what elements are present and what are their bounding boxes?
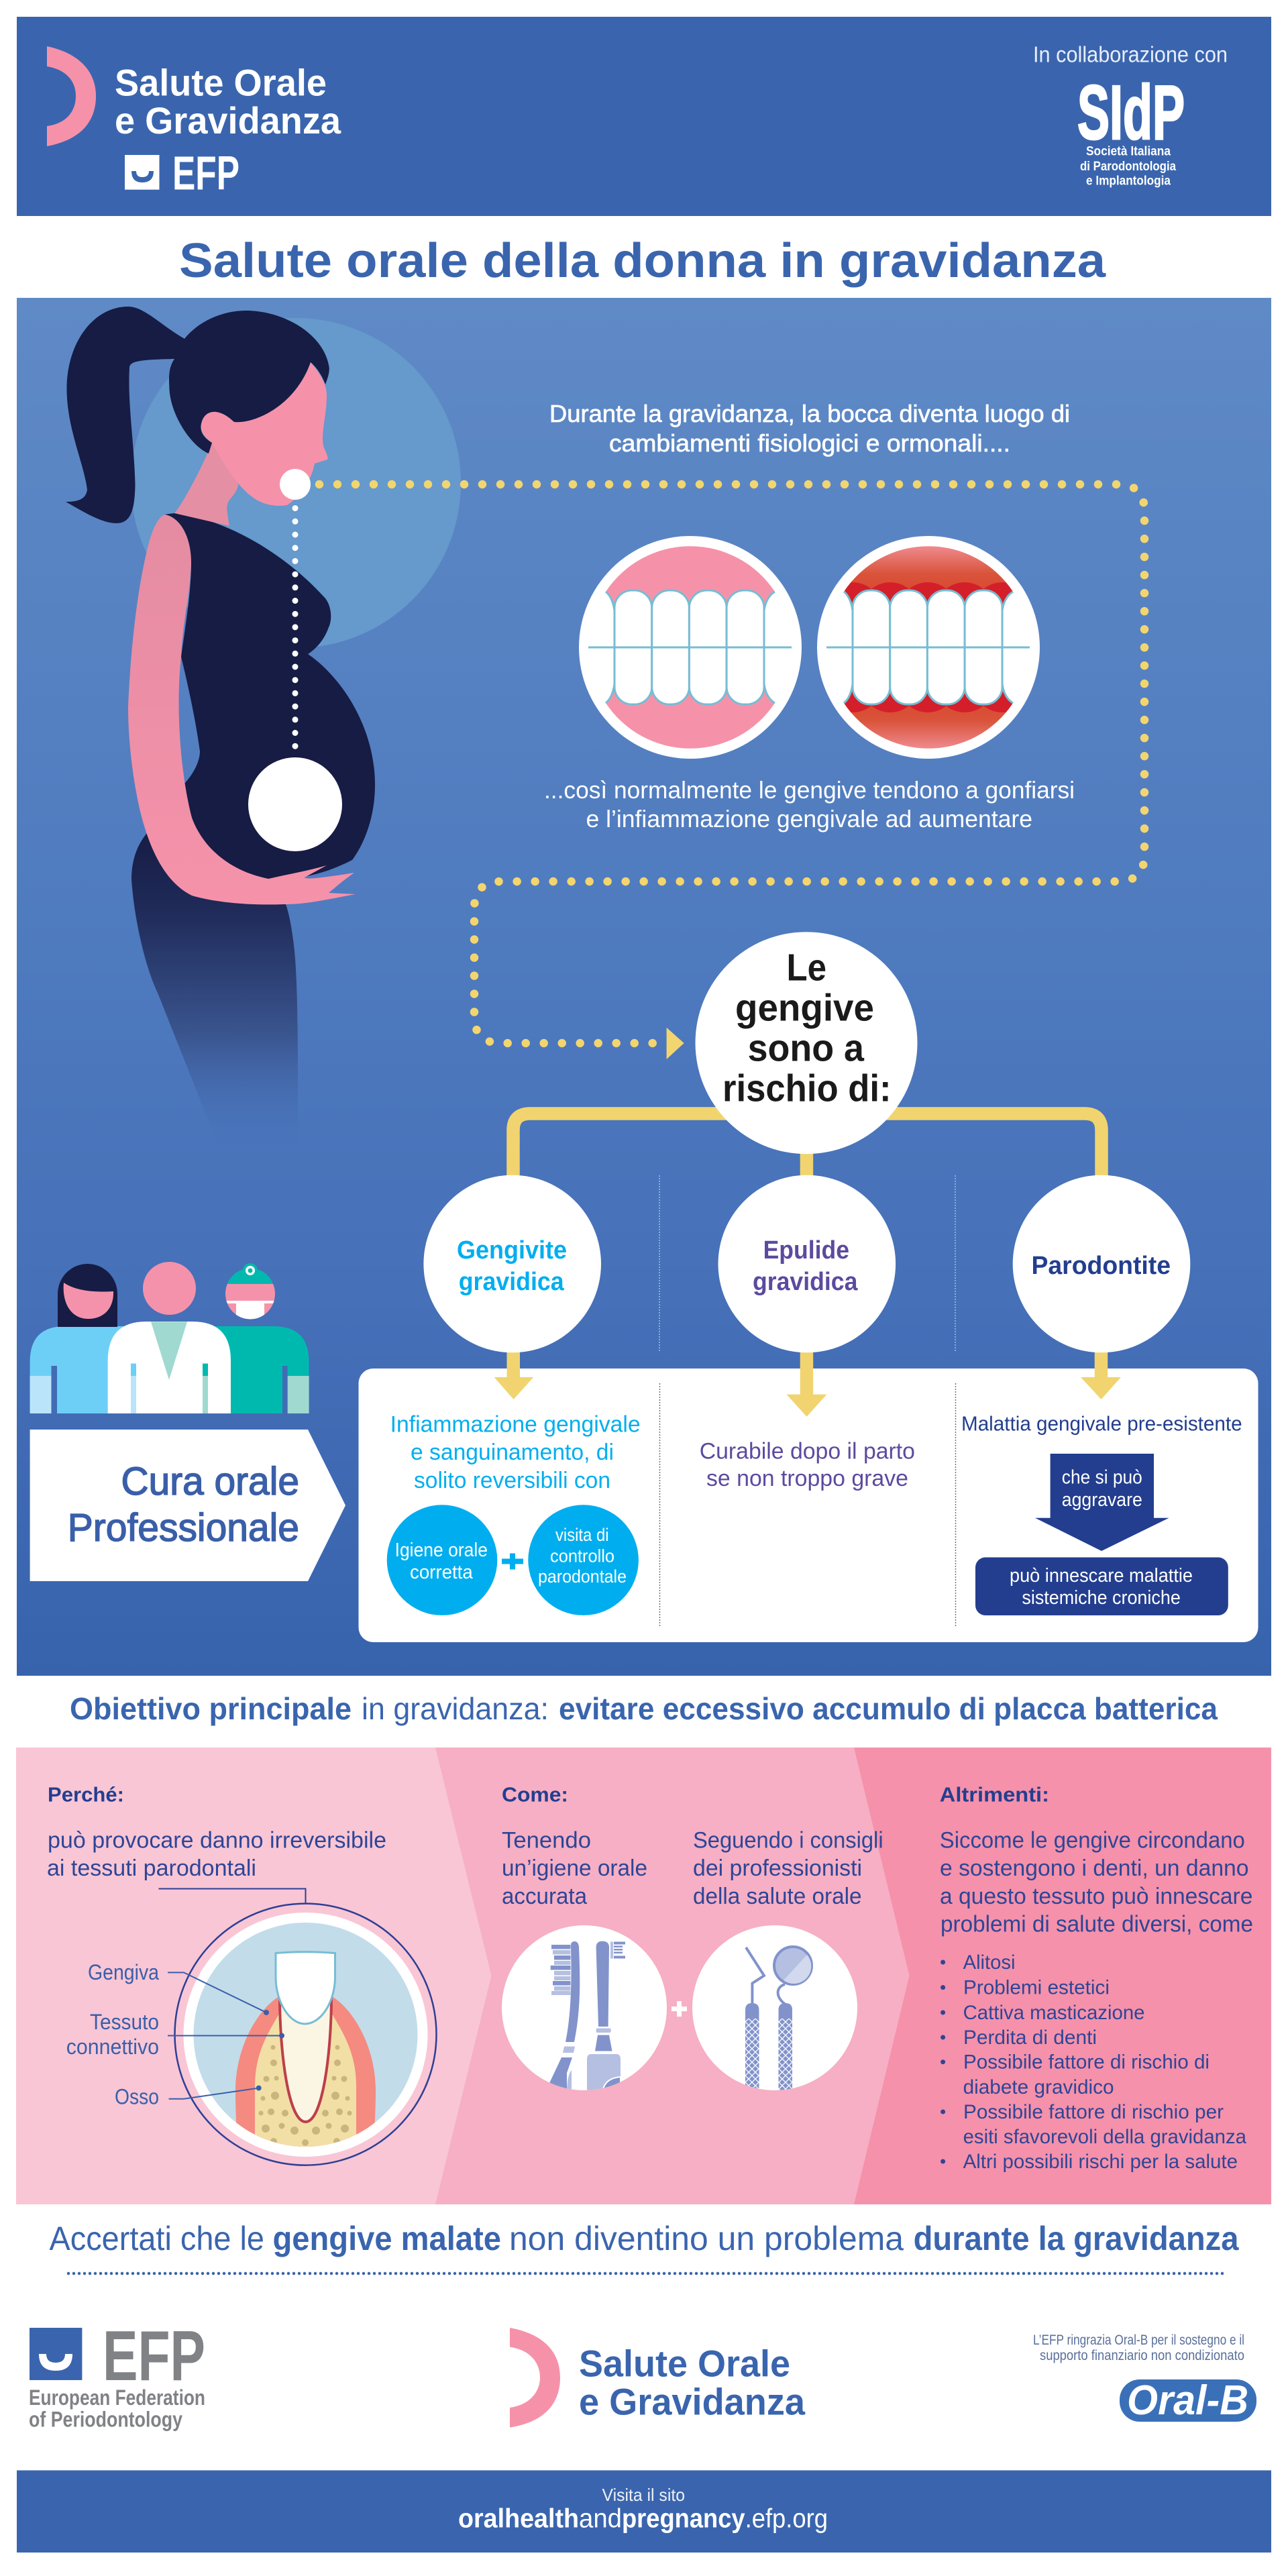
circle: gums at risk: rischio di: <box>722 1067 892 1110</box>
box: chronic systemic diseases: sistemiche croniche <box>1022 1587 1181 1609</box>
logo: SIdP <box>1077 70 1185 189</box>
text: gums consequence: e l’infiammazione gengivale ad aumentare <box>586 805 1032 833</box>
text: parodontite description: Malattia gengivale pre-esistente <box>961 1412 1242 1436</box>
section: altrimenti: problemi di salute diversi, come <box>941 1911 1253 1937</box>
text: sponsor thanks: L’EFP ringrazia Oral-B per il sostegno e il <box>1033 2332 1244 2348</box>
list: risks: Alitosi <box>963 1951 1016 1974</box>
text: epulide description: Curabile dopo il parto <box>700 1438 915 1464</box>
list: risks: Possibile fattore di rischio di <box>963 2051 1210 2074</box>
arrow: may worsen: aggravare <box>1062 1489 1142 1511</box>
heading: main goal: Obiettivo principale <box>70 1691 352 1726</box>
text: intro <box>549 400 1070 457</box>
text: gengivite description: solito reversibili con <box>414 1468 610 1493</box>
text: gengivite description <box>390 1412 641 1493</box>
logo: Salute Orale e Gravidanza <box>47 46 341 146</box>
circle: gums at risk: Le <box>786 947 826 989</box>
heading: closing message: durante la gravidanza <box>914 2220 1240 2257</box>
labels: tooth parts: connettivo <box>66 2035 159 2059</box>
logo: Salute Orale e Gravidanza <box>510 2328 806 2428</box>
logo: Salute Orale e Gravidanza: Salute Orale <box>579 2343 790 2384</box>
probe <box>745 1947 764 2092</box>
logo: SIdP: di Parodontologia <box>1080 160 1176 174</box>
heading: main goal: evitare eccessivo accumulo di placca batterica <box>559 1691 1218 1726</box>
box: chronic systemic diseases: può innescare malattie <box>1010 1565 1193 1587</box>
section: come: un’igiene orale <box>502 1856 647 1881</box>
badge: periodontal check-up: visita di <box>555 1525 609 1545</box>
labels: tooth parts: Gengiva <box>88 1960 159 1984</box>
panel: pink chevron band <box>16 1748 1271 2204</box>
logo: EFP European Federation of Periodontology: EFP <box>103 2316 205 2396</box>
list: risks: Cattiva masticazione <box>963 2002 1144 2024</box>
panel: white info card <box>358 1368 1258 1642</box>
list: risks: Possibile fattore di rischio per <box>963 2101 1224 2123</box>
badge: correct oral hygiene <box>387 1505 497 1615</box>
logo: Salute Orale e Gravidanza: e Gravidanza <box>115 99 341 142</box>
circle: gums at risk: sono a <box>748 1027 865 1070</box>
logo: EFP European Federation of Periodontology: of Periodontology <box>29 2407 182 2431</box>
section: come: Tenendo <box>502 1827 591 1853</box>
card dividers <box>660 1383 955 1627</box>
text: sponsor thanks <box>1033 2332 1244 2363</box>
arrow: parodontite <box>1081 1348 1121 1399</box>
electric brush <box>587 1941 625 2093</box>
section: altrimenti: Siccome le gengive circondano <box>940 1827 1245 1853</box>
logo: EFP white: EFP <box>172 148 239 201</box>
icon: healthy gums <box>579 536 802 759</box>
diagram: tooth cross-section <box>66 1889 436 2165</box>
illustration: care team <box>30 1262 309 1413</box>
logo: Salute Orale e Gravidanza: e Gravidanza <box>579 2381 806 2423</box>
section: come: Seguendo i consigli <box>693 1827 883 1853</box>
website link: oralhealth <box>458 2504 579 2533</box>
header banner <box>17 17 1271 216</box>
icon: dental instruments <box>692 1925 857 2092</box>
mirror <box>774 1947 812 2092</box>
arrow: may worsen <box>1035 1454 1169 1551</box>
text: epulide description: se non troppo grave <box>706 1466 908 1491</box>
list: risks <box>941 1951 1246 2173</box>
icon: inflamed gums <box>817 536 1040 759</box>
list: risks: Altri possibili rischi per la salute <box>963 2151 1238 2173</box>
heading: main goal <box>70 1691 1218 1726</box>
section: altrimenti: e sostengono i denti, un danno <box>940 1856 1249 1881</box>
section: perché: ai tessuti parodontali <box>47 1856 256 1881</box>
footer banner: Visita il sito <box>602 2485 685 2505</box>
heading: closing message: gengive malate <box>272 2220 501 2257</box>
badge: correct oral hygiene: corretta <box>410 1562 474 1583</box>
icon: toothbrushes <box>502 1925 667 2093</box>
section: come: accurata <box>502 1884 587 1909</box>
circle: gengivite gravidica <box>423 1175 601 1352</box>
callout: professional oral care: Cura orale <box>121 1460 299 1503</box>
section: perché: Perché: <box>48 1783 124 1807</box>
heading: closing message: Accertati che le <box>50 2220 264 2257</box>
website link <box>458 2504 828 2533</box>
website link: and <box>579 2504 622 2533</box>
section: perché <box>47 1783 386 1881</box>
section: altrimenti: a questo tessuto può innescare <box>940 1884 1252 1909</box>
text: intro: cambiamenti fisiologici e ormonali.... <box>609 429 1010 457</box>
circle: gengivite gravidica: Gengivite <box>457 1236 567 1265</box>
badge: periodontal check-up: parodontale <box>538 1566 627 1587</box>
logo: SIdP: e Implantologia <box>1086 174 1171 189</box>
section: perché: può provocare danno irreversibile <box>48 1827 386 1853</box>
circle: gengivite gravidica: gravidica <box>459 1268 565 1296</box>
box: chronic systemic diseases <box>975 1558 1228 1615</box>
title: Salute orale della donna in gravidanza <box>179 234 1106 288</box>
circle: gums at risk <box>695 932 918 1154</box>
section: altrimenti <box>940 1783 1253 2173</box>
section: come <box>502 1783 883 1909</box>
circle: epulide gravidica: Epulide <box>763 1236 849 1265</box>
text: gengivite description: Infiammazione gengivale <box>390 1412 641 1438</box>
labels: tooth parts: Osso <box>115 2085 159 2109</box>
heading: closing message <box>50 2220 1240 2257</box>
mouth marker <box>280 469 311 500</box>
section: come: della salute orale <box>693 1884 861 1909</box>
text: gums consequence: ...così normalmente le gengive tendono a gonfiarsi <box>544 776 1075 804</box>
heading: main goal: in gravidanza: <box>362 1691 549 1726</box>
arrow: may worsen: che si può <box>1062 1467 1142 1489</box>
logo: EFP European Federation of Periodontology: European Federation <box>29 2385 205 2410</box>
logo: Salute Orale e Gravidanza: Salute Orale <box>115 62 327 104</box>
badge: periodontal check-up <box>528 1505 639 1615</box>
list: risks: Perdita di denti <box>963 2027 1097 2049</box>
badge: correct oral hygiene: Igiene orale <box>395 1540 488 1561</box>
labels: tooth parts <box>66 1960 284 2109</box>
footer banner <box>17 2470 1271 2553</box>
circle: gums at risk: gengive <box>735 987 874 1030</box>
text: in collaborazione con: In collaborazione con <box>1033 42 1228 67</box>
list: risks: diabete gravidico <box>963 2076 1114 2098</box>
circle: epulide gravidica <box>718 1175 896 1352</box>
section: come: dei professionisti <box>693 1856 862 1881</box>
logo: EFP white <box>125 148 239 201</box>
logo: SIdP: SIdP <box>1077 70 1185 156</box>
logo: SIdP: Società Italiana <box>1086 145 1171 159</box>
list: risks: esiti sfavorevoli della gravidanza <box>963 2126 1246 2148</box>
arrow: yellow dotted path <box>319 484 1144 1059</box>
callout: professional oral care <box>30 1430 345 1581</box>
illustration: pregnant woman <box>66 307 461 1146</box>
icon: plus <box>502 1554 523 1570</box>
callout: professional oral care: Professionale <box>68 1506 299 1550</box>
logo: Oral-B: Oral-B <box>1127 2377 1248 2424</box>
dotted line mouth to baby <box>292 508 298 747</box>
website link: pregnancy <box>622 2504 745 2533</box>
text: gums consequence <box>544 776 1075 833</box>
section: altrimenti: Altrimenti: <box>940 1783 1049 1807</box>
logo: EFP European Federation of Periodontology <box>29 2316 205 2431</box>
heading: closing message: non diventino un problema <box>509 2220 904 2257</box>
arrow: epulide <box>786 1348 826 1417</box>
manual brush <box>549 1941 580 2089</box>
panel: main blue panel <box>17 298 1271 1676</box>
circle: parodontite <box>1013 1175 1190 1352</box>
labels: tooth parts: Tessuto <box>90 2010 159 2034</box>
website link: .efp.org <box>745 2504 828 2533</box>
text: epulide description <box>700 1438 915 1491</box>
text: gengivite description: e sanguinamento, di <box>411 1440 614 1465</box>
circle: epulide gravidica: gravidica <box>753 1268 858 1296</box>
text: intro: Durante la gravidanza, la bocca diventa luogo di <box>549 400 1070 427</box>
text: sponsor thanks: supporto finanziario non condizionato <box>1040 2348 1244 2363</box>
list: risks: Problemi estetici <box>963 1977 1110 1999</box>
section: come: Come: <box>502 1783 568 1807</box>
circle: parodontite: Parodontite <box>1032 1252 1171 1280</box>
connector: yellow branches <box>513 1114 1102 1181</box>
arrow: gengivite <box>494 1348 533 1399</box>
dividers between conditions <box>659 1175 955 1352</box>
icon: plus <box>672 2001 687 2017</box>
baby circle <box>248 757 342 851</box>
badge: periodontal check-up: controllo <box>550 1546 614 1566</box>
